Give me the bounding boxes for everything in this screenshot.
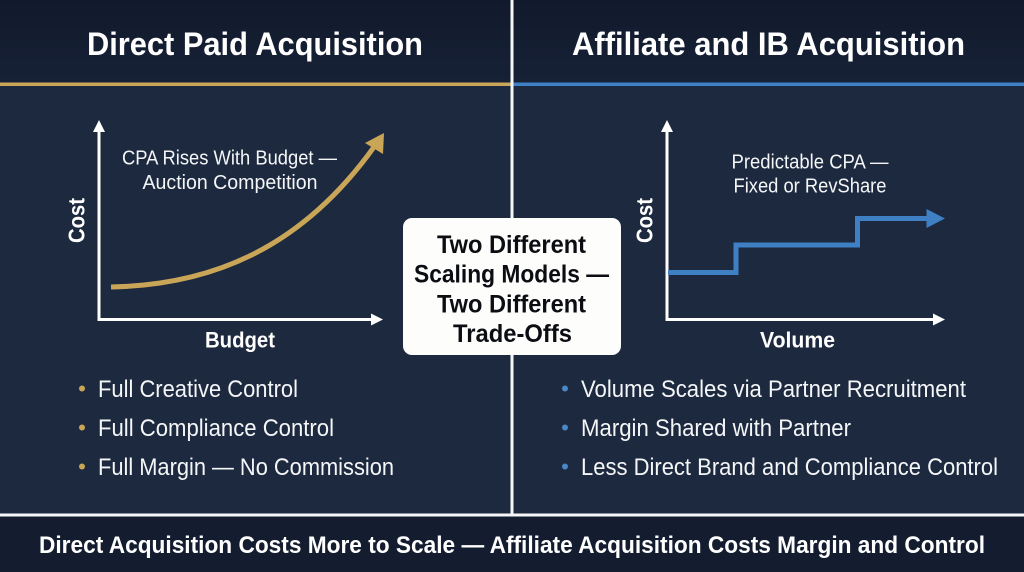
right bullet list: Margin Shared with Partner: [581, 415, 851, 442]
right step arrow: [668, 209, 945, 272]
left chart annotation: CPA Rises With Budget —: [122, 148, 337, 170]
panel: left header: [0, 0, 511, 83]
left bullet list: [79, 376, 394, 481]
left chart annotation: [122, 148, 337, 194]
heading: affiliate and ib acquisition: Affiliate and IB Acquisition: [572, 26, 965, 62]
right chart annotation: Fixed or RevShare: [734, 176, 886, 198]
right y-axis label: Cost: [632, 198, 658, 243]
panel: right header: [513, 0, 1024, 83]
heading: direct paid acquisition: Direct Paid Acquisition: [87, 26, 423, 62]
left chart: [64, 120, 384, 352]
right bullet list: Less Direct Brand and Compliance Control: [581, 454, 998, 481]
footer takeaway text: Direct Acquisition Costs More to Scale — Affiliate Acquisition Costs Margin and Control: [39, 532, 985, 559]
left curve arrow: [111, 133, 384, 287]
right chart: [632, 120, 945, 352]
left chart annotation: Auction Competition: [142, 172, 318, 194]
right bullet list: [562, 376, 998, 481]
center callout: [403, 218, 621, 355]
left bullet list: Full Compliance Control: [98, 415, 334, 442]
right chart annotation: [732, 152, 888, 198]
center callout: Two Different: [437, 290, 587, 318]
left x-axis label: Budget: [205, 328, 276, 352]
left bullet list: Full Margin — No Commission: [98, 454, 394, 481]
footer banner: [0, 514, 1024, 572]
left chart axes: [93, 120, 383, 326]
right chart annotation: Predictable CPA —: [732, 152, 888, 174]
right bullet list: Volume Scales via Partner Recruitment: [581, 376, 966, 403]
right x-axis label: Volume: [760, 328, 835, 352]
center callout: Trade-Offs: [453, 320, 572, 348]
left y-axis label: Cost: [64, 198, 90, 243]
left bullet list: Full Creative Control: [98, 376, 298, 403]
right chart axes: [661, 120, 945, 326]
center callout: Two Different: [437, 231, 587, 259]
center callout: Scaling Models —: [414, 260, 609, 288]
